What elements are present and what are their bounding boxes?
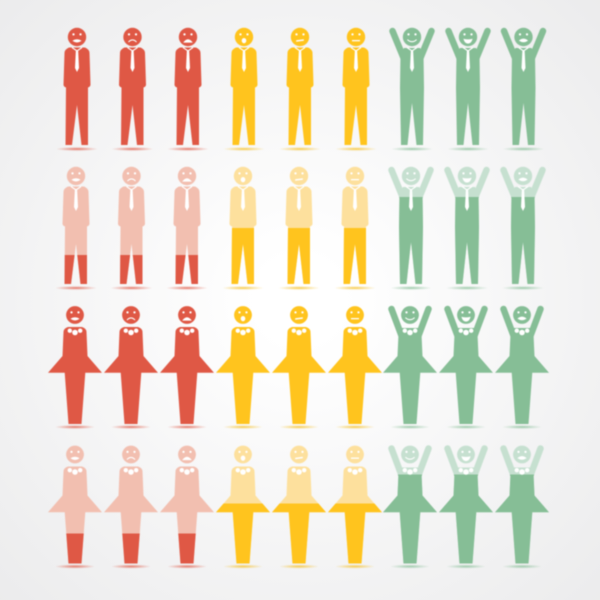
man: green, high fill <box>390 167 432 290</box>
man: green, smile <box>391 28 433 151</box>
woman: green, high fill <box>383 446 437 568</box>
man: yellow, half fill <box>222 167 264 290</box>
woman: yellow, half fill, neutral <box>328 446 382 568</box>
man: green, big smile <box>447 28 489 151</box>
woman: yellow, half fill, smirk <box>272 446 326 568</box>
woman: green, big smile <box>439 306 493 429</box>
woman: red, low fill <box>48 446 102 568</box>
man: red, open mouth <box>56 28 98 151</box>
row 3: women full colour <box>48 306 549 429</box>
woman: green, high fill, laughing <box>495 446 549 568</box>
man: yellow, half fill, neutral <box>334 167 376 290</box>
woman: green, high fill, big smile <box>439 446 493 568</box>
woman: yellow, half fill <box>216 446 270 568</box>
woman: red, low fill, frown <box>104 446 158 568</box>
woman: yellow, neutral <box>328 306 382 429</box>
figure grid <box>48 28 549 569</box>
woman: green, laughing <box>495 306 549 429</box>
woman: red, low fill, distressed <box>160 446 214 568</box>
woman: red, frown <box>104 306 158 429</box>
man: red, low fill <box>55 167 97 290</box>
row 4: women partly filled <box>48 446 549 568</box>
man: green, high fill, laughing <box>502 167 544 290</box>
row 1: men full colour <box>56 28 544 151</box>
woman: red, open mouth <box>48 306 102 429</box>
man: green, laughing <box>502 28 544 151</box>
man: red, low fill, frown <box>110 167 152 290</box>
woman: green, smile <box>383 306 437 429</box>
man: yellow, half fill, smirk <box>278 167 320 290</box>
man: red, low fill, distressed <box>166 167 208 290</box>
row 2: men partly filled <box>55 167 544 290</box>
man: yellow, neutral <box>335 28 377 151</box>
woman: red, distressed <box>160 306 214 429</box>
woman: yellow, smirk <box>272 306 326 429</box>
man: red, frown <box>112 28 154 151</box>
woman: yellow, surprised <box>216 306 270 429</box>
man: red, distressed <box>167 28 209 151</box>
man: yellow, surprised <box>223 28 265 151</box>
man: green, high fill, big smile <box>446 167 488 290</box>
man: yellow, smirk <box>279 28 321 151</box>
